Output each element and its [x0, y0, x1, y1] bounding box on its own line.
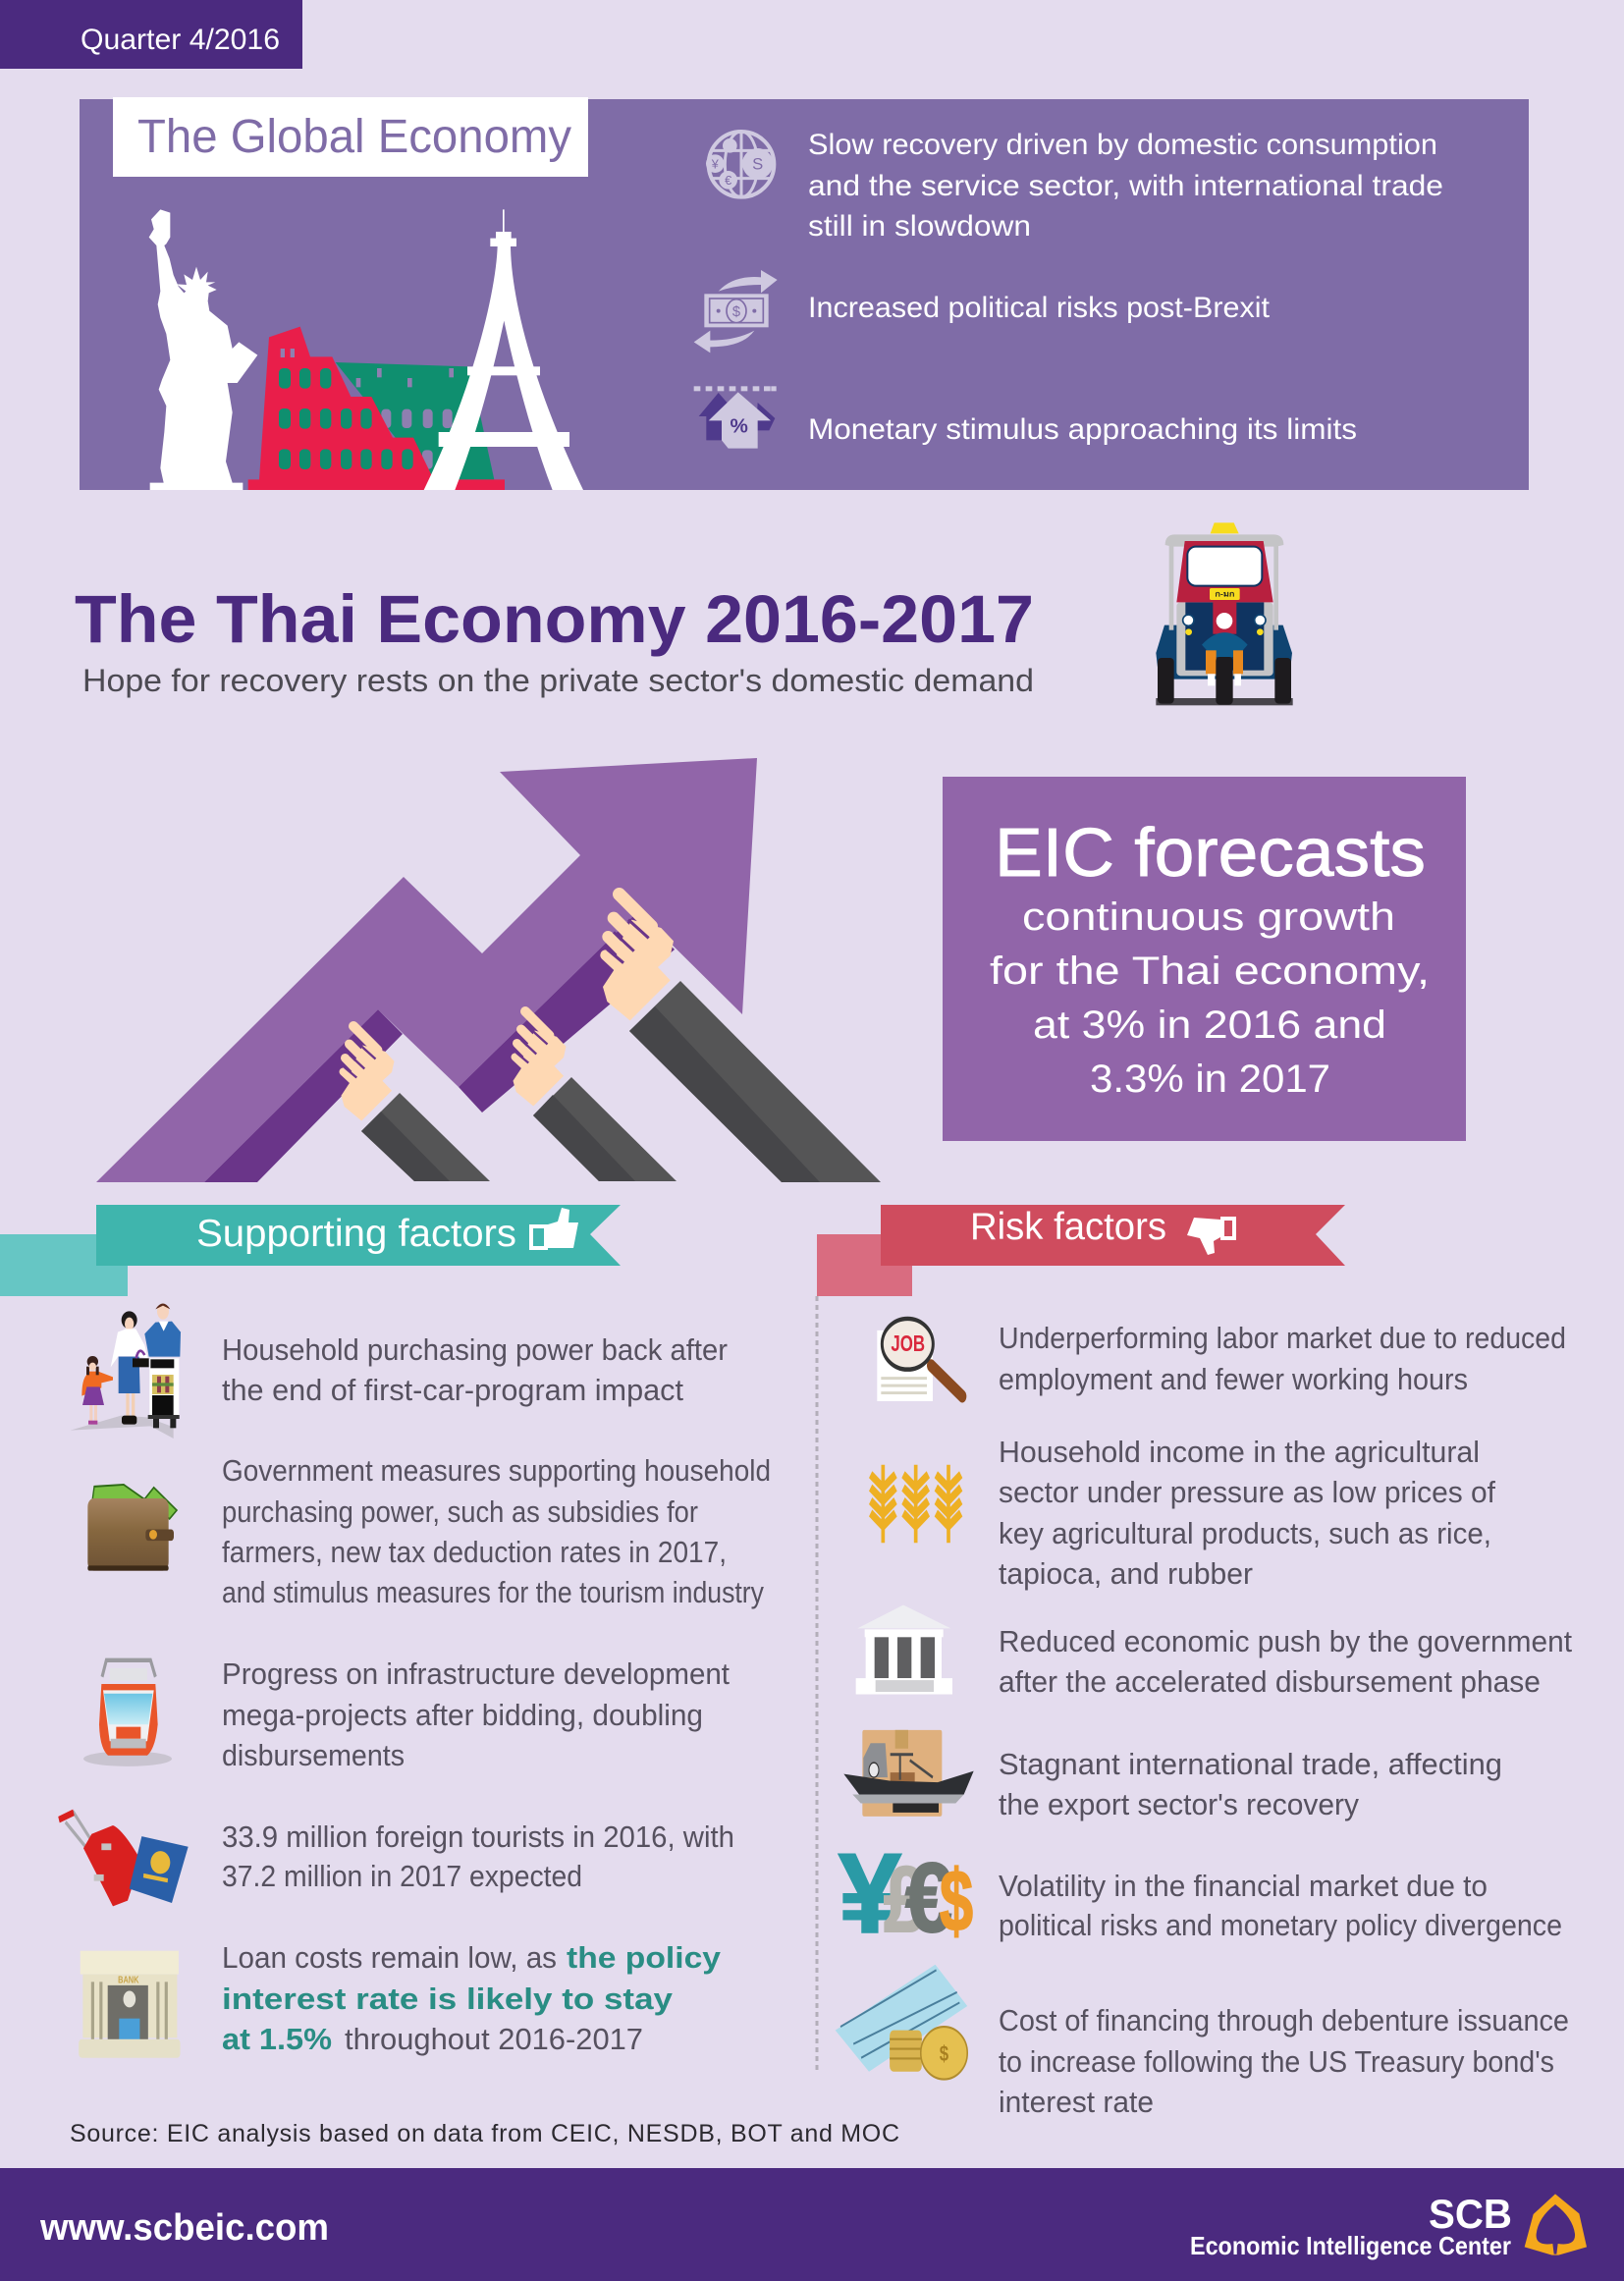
icon: bank building [79, 1951, 181, 2058]
icon: bank building: BANK [118, 1975, 139, 1985]
icon: globe with currencies: € [725, 174, 731, 188]
risk factors list: sector under pressure as low prices of [999, 1475, 1495, 1509]
risk factors list: Underperforming labor market due to reduced [999, 1321, 1566, 1355]
illustration: growth arrow held up by hands [96, 758, 881, 1182]
footer: Economic Intelligence Center [1190, 2231, 1511, 2260]
main title [75, 581, 1034, 698]
global economy bullet points: and the service sector, with international trade [808, 170, 1443, 202]
global economy bullet points: still in slowdown [808, 210, 1031, 243]
supporting factors list: interest rate is likely to stay [222, 1982, 674, 2016]
supporting factors list: at 1.5% [222, 2022, 332, 2056]
risk factors list: political risks and monetary policy divergence [999, 1908, 1562, 1942]
supporting factors list: 33.9 million foreign tourists in 2016, with [222, 1819, 734, 1854]
risk factors list: Household income in the agricultural [999, 1435, 1480, 1469]
risk factors list: Stagnant international trade, affecting [999, 1747, 1502, 1781]
icon: currency symbols: € [905, 1843, 952, 1953]
icon: wheat stalks [871, 1465, 961, 1543]
icon: cargo ship and box [843, 1730, 974, 1817]
icon: train [83, 1660, 172, 1766]
risk factors list: to increase following the US Treasury bond's [999, 2044, 1554, 2079]
supporting factors list: and stimulus measures for the tourism industry [222, 1575, 764, 1609]
banner: supporting factors [0, 1205, 621, 1296]
supporting factors list: the end of first-car-program impact [222, 1373, 683, 1407]
supporting factors list: purchasing power, such as subsidies for [222, 1494, 698, 1529]
icon: wallet with cash [87, 1485, 177, 1571]
risk factors list: Cost of financing through debenture issuance [999, 2003, 1569, 2037]
supporting factors list: farmers, new tax deduction rates in 2017, [222, 1535, 727, 1569]
callout: EIC forecasts: EIC forecasts [995, 814, 1426, 891]
panel: the global economy [80, 97, 1529, 490]
icon: SCB logo [1525, 2194, 1587, 2255]
global economy bullet points: Increased political risks post-Brexit [808, 292, 1271, 324]
supporting factors list: Loan costs remain low, as [222, 1940, 557, 1975]
icon: suitcase and passport [59, 1813, 189, 1906]
main title: Hope for recovery rests on the private sector's domestic demand [82, 663, 1034, 698]
footer [0, 2168, 1624, 2281]
footer: SCB [1429, 2191, 1512, 2237]
icon: rising rates house: % [730, 415, 748, 438]
icon: globe with currencies: S [752, 155, 763, 174]
icon: banknote with exchange arrows: $ [732, 304, 740, 320]
hand: left [341, 1026, 394, 1120]
heading: the global economy [113, 97, 588, 177]
risk factors list: the export sector's recovery [999, 1787, 1359, 1821]
callout: EIC forecasts [943, 777, 1466, 1141]
risk factors list: key agricultural products, such as rice, [999, 1516, 1491, 1550]
icon: currency symbols: £ [884, 1848, 925, 1952]
risk factors list: tapioca, and rubber [999, 1556, 1253, 1591]
supporting factors list [222, 1332, 771, 2056]
hand: right [603, 895, 674, 1020]
supporting factors list: Progress on infrastructure development [222, 1656, 730, 1691]
illustration: world landmarks [149, 209, 583, 490]
supporting factors list: the policy [567, 1940, 722, 1975]
source note: Source: EIC analysis based on data from CEIC, NESDB, BOT and MOC [70, 2120, 899, 2147]
supporting factors list: mega-projects after bidding, doubling [222, 1698, 703, 1732]
callout: EIC forecasts: continuous growth [1022, 896, 1395, 939]
banner: risk factors: Risk factors [970, 1206, 1166, 1248]
icon: currency symbols: $ [940, 1852, 973, 1949]
banner: risk factors [817, 1205, 1345, 1296]
banner: supporting factors: Supporting factors [196, 1213, 516, 1255]
supporting factors list: Household purchasing power back after [222, 1332, 728, 1367]
icon: tuk-tuk: ก-มก [1215, 590, 1235, 599]
callout: EIC forecasts: at 3% in 2016 and [1033, 1004, 1386, 1047]
icon: cheque and gold coins [836, 1965, 967, 2080]
sleeves [361, 981, 881, 1182]
risk factors list: Reduced economic push by the government [999, 1624, 1572, 1658]
risk factors list: employment and fewer working hours [999, 1362, 1468, 1396]
icon: tuk-tuk [1156, 522, 1293, 705]
icon: currency symbols: ¥ [839, 1831, 901, 1957]
global economy bullet points [808, 129, 1443, 446]
supporting factors list: Government measures supporting household [222, 1453, 771, 1488]
global economy bullet points: Monetary stimulus approaching its limits [808, 413, 1357, 446]
icon: thumbs down [1187, 1218, 1234, 1255]
icon: government building [856, 1604, 952, 1695]
risk factors list [999, 1321, 1572, 2119]
risk factors list: after the accelerated disbursement phase [999, 1664, 1541, 1699]
icon: currency symbols [839, 1831, 973, 1957]
icon: globe with currencies [706, 132, 774, 197]
risk factors list: Volatility in the financial market due to [999, 1869, 1488, 1903]
icon: thumbs up [531, 1208, 578, 1248]
icon: job search magnifier: JOB [891, 1331, 925, 1357]
supporting factors list: 37.2 million in 2017 expected [222, 1859, 582, 1893]
callout: EIC forecasts: for the Thai economy, [990, 950, 1430, 993]
hand: middle [513, 1011, 566, 1106]
global economy bullet points: Slow recovery driven by domestic consumption [808, 129, 1437, 161]
footer: www.scbeic.com [39, 2207, 329, 2249]
icon: globe with currencies: ¥ [711, 157, 720, 171]
supporting factors list: disbursements [222, 1738, 405, 1772]
risk factors list: interest rate [999, 2085, 1154, 2119]
supporting factors list: throughout 2016-2017 [345, 2022, 643, 2056]
quarter label [0, 0, 302, 69]
icon: rising rates house [694, 386, 777, 449]
icon: banknote with exchange arrows [694, 270, 778, 353]
icon: family with shopping cart [71, 1303, 181, 1439]
icon: cheque and gold coins: $ [940, 2042, 948, 2067]
heading: the global economy: The Global Economy [137, 111, 571, 163]
arrow [96, 758, 757, 1182]
main title: The Thai Economy 2016-2017 [75, 581, 1034, 657]
quarter label: Quarter 4/2016 [81, 24, 280, 56]
icon: job search magnifier [877, 1319, 962, 1401]
callout: EIC forecasts: 3.3% in 2017 [1090, 1058, 1330, 1101]
